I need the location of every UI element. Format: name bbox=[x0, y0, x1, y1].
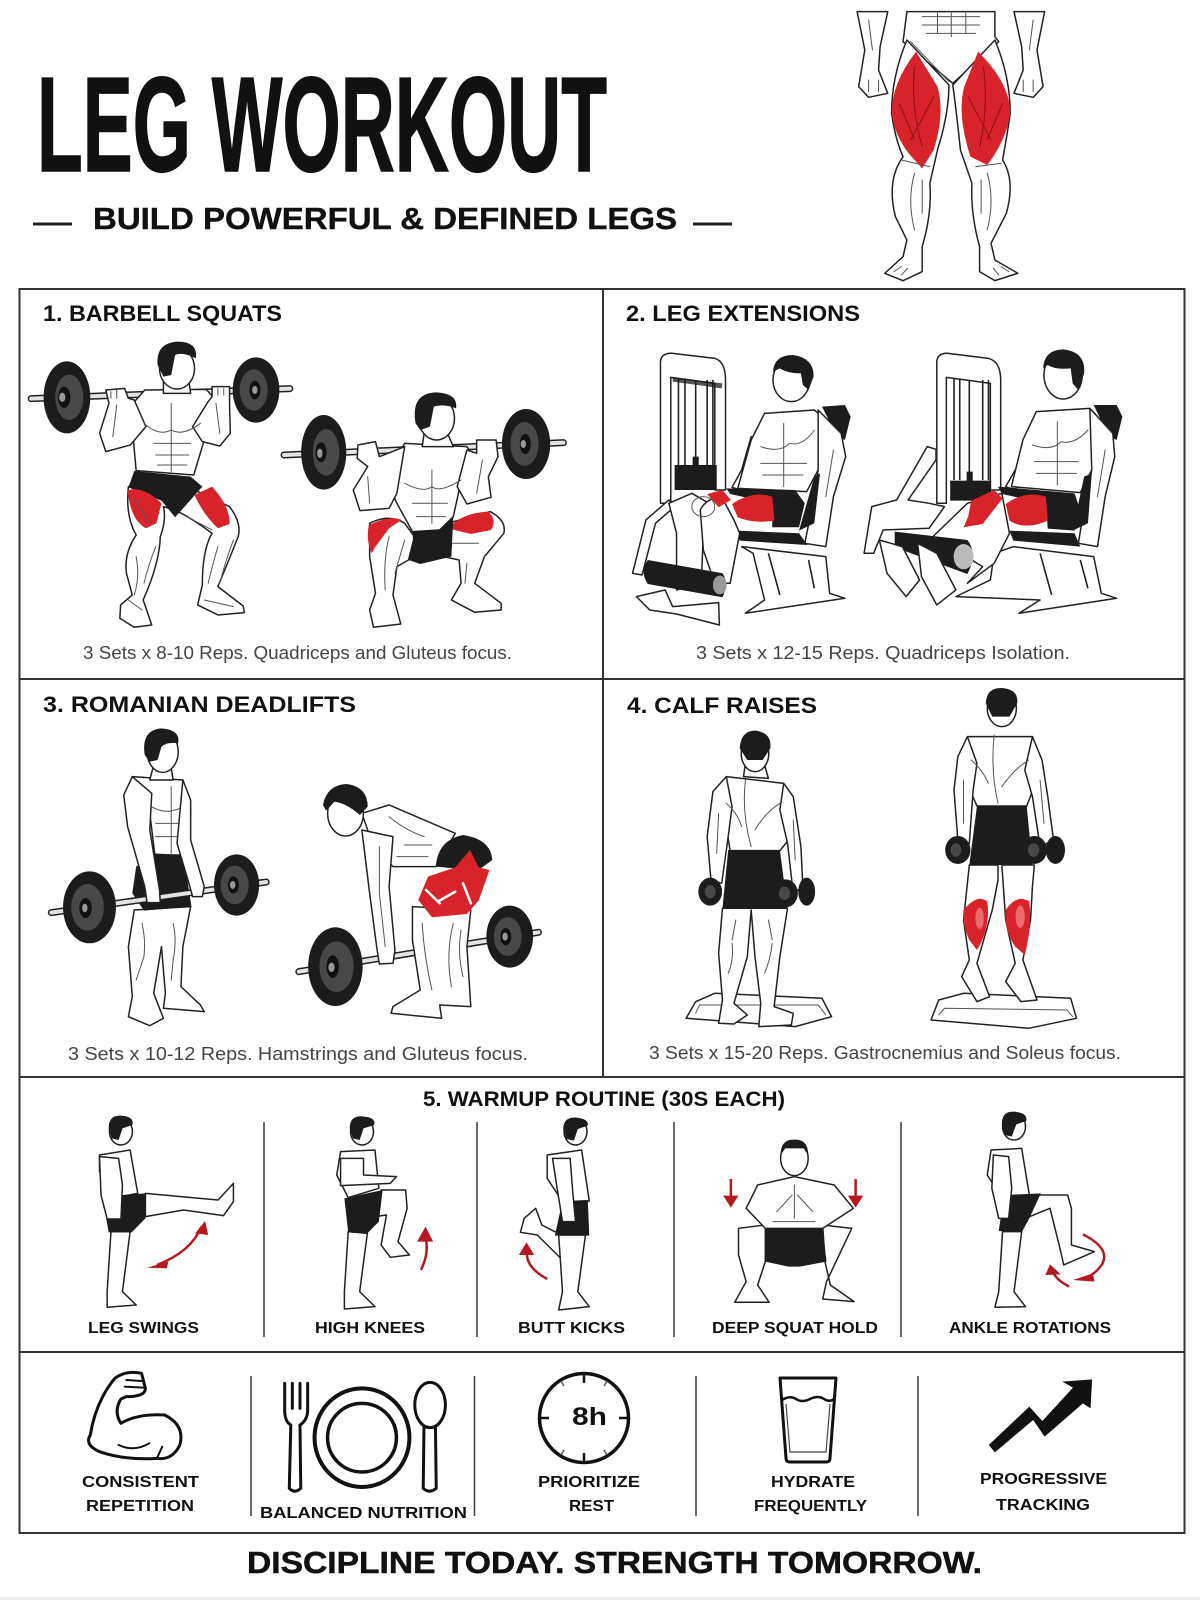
caption: 3 Sets x 8-10 Reps. Quadriceps and Gluteus focus. bbox=[83, 642, 512, 663]
panel: barbell squats bbox=[31, 301, 563, 663]
panel: calf raises bbox=[627, 688, 1121, 1063]
label: balanced nutrition: BALANCED NUTRITION bbox=[260, 1505, 467, 1522]
label: BUTT KICKS bbox=[518, 1320, 625, 1337]
label: hydrate frequently bbox=[754, 1474, 867, 1515]
caption: 3 Sets x 15-20 Reps. Gastrocnemius and Soleus focus. bbox=[649, 1042, 1121, 1063]
heading: 2. LEG EXTENSIONS bbox=[626, 301, 860, 326]
label: progressive tracking bbox=[980, 1471, 1107, 1514]
label: prioritize rest: REST bbox=[569, 1498, 614, 1515]
footer slogan: DISCIPLINE TODAY. STRENGTH TOMORROW. bbox=[247, 1545, 982, 1580]
page header bbox=[33, 12, 1045, 281]
warmup: butt kicks bbox=[518, 1118, 625, 1337]
icon: flexed bicep bbox=[89, 1372, 181, 1459]
label: progressive tracking: TRACKING bbox=[996, 1497, 1090, 1514]
icon: glass of water bbox=[780, 1378, 836, 1462]
panel: lifestyle tips bbox=[82, 1372, 1107, 1522]
main frame and grid bbox=[20, 289, 1184, 1533]
hinged pose bbox=[299, 932, 539, 972]
panel: warmup routine bbox=[88, 1088, 1111, 1337]
label: prioritize rest bbox=[538, 1474, 640, 1515]
label: consistent repetition bbox=[82, 1474, 199, 1515]
warmup: leg swings bbox=[88, 1116, 233, 1337]
label: prioritize rest: PRIORITIZE bbox=[538, 1474, 640, 1491]
warmup: ankle rotations bbox=[949, 1112, 1111, 1337]
second pose bbox=[284, 443, 563, 455]
icon: clock showing 8h bbox=[539, 1373, 629, 1463]
label: ANKLE ROTATIONS bbox=[949, 1320, 1111, 1337]
icon: clock showing 8h: 8h bbox=[572, 1403, 607, 1431]
icon: rising trend arrow bbox=[989, 1379, 1092, 1452]
illustration: deadlift standing and hinged, hamstrings highlighted bbox=[51, 728, 539, 1026]
illustration: barbell squat standing and low positions bbox=[31, 342, 563, 627]
caption: 3 Sets x 12-15 Reps. Quadriceps Isolation. bbox=[696, 642, 1070, 663]
label: progressive tracking: PROGRESSIVE bbox=[980, 1471, 1107, 1488]
raised pose bbox=[931, 993, 1076, 1028]
heading: 5. WARMUP ROUTINE (30S EACH) bbox=[423, 1088, 785, 1111]
label: consistent repetition: REPETITION bbox=[86, 1498, 194, 1515]
illustration: leg extension machine, bent and extended bbox=[633, 349, 1122, 625]
heading: 1. BARBELL SQUATS bbox=[43, 301, 282, 326]
anatomy figure: front legs with quadriceps highlighted bbox=[857, 12, 1045, 281]
heading: 4. CALF RAISES bbox=[627, 693, 817, 718]
warmup dividers bbox=[264, 1122, 901, 1337]
panel: leg extensions bbox=[626, 301, 1122, 663]
warmup: high knees bbox=[315, 1116, 433, 1337]
label: hydrate frequently: HYDRATE bbox=[771, 1474, 855, 1491]
icon: fork, plate and spoon bbox=[285, 1382, 445, 1491]
warmup: deep squat hold bbox=[712, 1140, 878, 1337]
label: LEG SWINGS bbox=[88, 1320, 199, 1337]
label: hydrate frequently: FREQUENTLY bbox=[754, 1498, 867, 1515]
caption: 3 Sets x 10-12 Reps. Hamstrings and Gluteus focus. bbox=[68, 1043, 528, 1064]
label: HIGH KNEES bbox=[315, 1320, 425, 1337]
label: DEEP SQUAT HOLD bbox=[712, 1320, 878, 1337]
title: LEG WORKOUT bbox=[37, 49, 607, 200]
subtitle: BUILD POWERFUL & DEFINED LEGS bbox=[93, 201, 677, 236]
extended pose bbox=[937, 353, 1001, 503]
heading: 3. ROMANIAN DEADLIFTS bbox=[43, 692, 356, 717]
panel: romanian deadlifts bbox=[43, 692, 539, 1064]
label: consistent repetition: CONSISTENT bbox=[82, 1474, 199, 1491]
tips dividers bbox=[251, 1376, 918, 1516]
illustration: calf raise flat and raised on step, calves highlighted bbox=[686, 688, 1076, 1028]
